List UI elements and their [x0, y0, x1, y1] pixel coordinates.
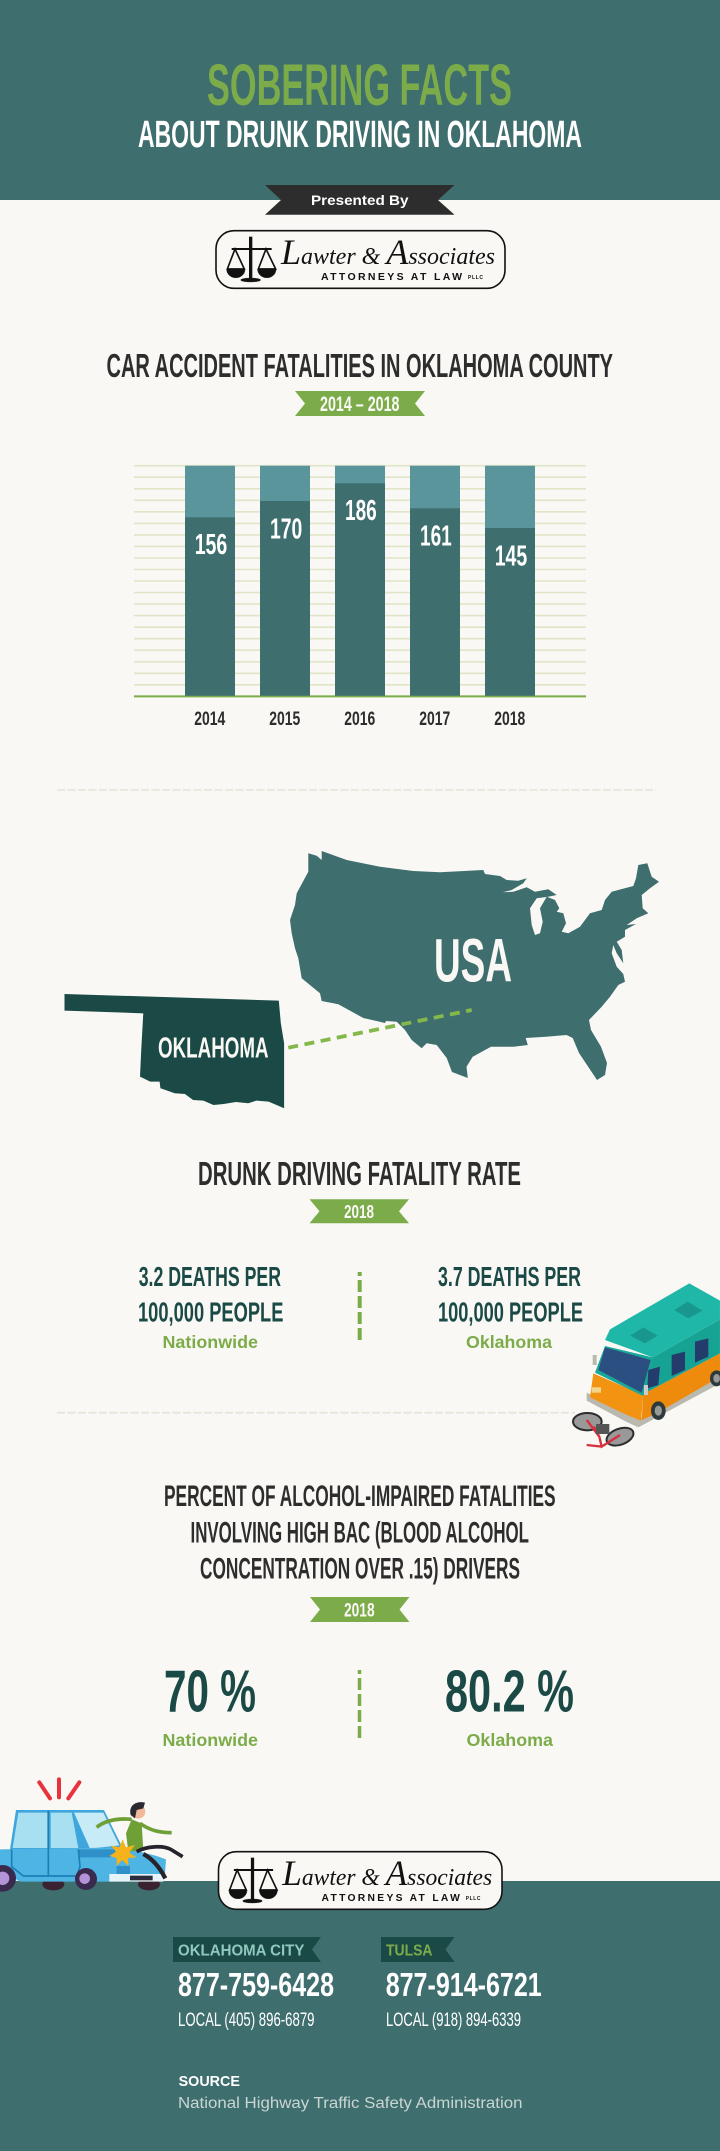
- header banner: [0, 0, 720, 200]
- stat: oklahoma percent: Oklahoma: [466, 1730, 553, 1750]
- bar 2014: 156: [195, 529, 227, 561]
- logo: Lawter & Associates: [216, 231, 505, 288]
- heading: fatality rate: DRUNK DRIVING FATALITY RATE: [198, 1156, 521, 1193]
- icon: bicycle: [573, 1413, 636, 1449]
- stat: oklahoma percent: 80.2 %: [445, 1659, 574, 1725]
- logo: Lawter & Associates: Lawter & Associates: [280, 232, 495, 272]
- stat: oklahoma rate: Oklahoma: [466, 1332, 552, 1352]
- contact: Tulsa: [381, 1937, 542, 2031]
- stat: nationwide rate: Nationwide: [162, 1332, 258, 1352]
- presented by ribbon: [265, 185, 454, 215]
- ribbon: 2014-2018: [295, 391, 425, 416]
- contact: Oklahoma City: OKLAHOMA CITY: [178, 1942, 305, 1959]
- pedestrian: [97, 1802, 183, 1878]
- contact: Tulsa: LOCAL (918) 894-6339: [386, 2009, 521, 2031]
- connector: dashed arrow line: [288, 1010, 472, 1048]
- bar 2017: [410, 466, 460, 730]
- bar chart: [134, 466, 586, 730]
- bar 2014: 2014: [194, 708, 225, 730]
- stat: nationwide rate: 3.2 DEATHS PER: [139, 1261, 281, 1292]
- map: Oklahoma: [64, 994, 284, 1108]
- logo: Lawter & Associates: PLLC: [468, 275, 483, 281]
- map: Oklahoma: OKLAHOMA: [158, 1032, 269, 1064]
- footer band: [0, 1881, 720, 2151]
- impact star: [109, 1839, 137, 1866]
- bar 2017: 2017: [419, 708, 450, 730]
- ribbon: 2018: [310, 1597, 410, 1622]
- bar 2015: 2015: [269, 708, 300, 730]
- logo: Lawter & Associates (footer): [218, 1852, 502, 1909]
- source: National Highway Traffic Safety Administration: [178, 2095, 522, 2112]
- contact: Oklahoma City: 877-759-6428: [178, 1967, 334, 2004]
- bar 2014: [185, 466, 235, 730]
- contact: Oklahoma City: LOCAL (405) 896-6879: [178, 2009, 314, 2031]
- ribbon: 2014-2018: 2014 – 2018: [320, 393, 400, 416]
- ribbon: 2018: 2018: [344, 1201, 374, 1222]
- logo: Lawter & Associates (footer): Lawter & Associates: [281, 1853, 492, 1893]
- logo: Lawter & Associates (footer): PLLC: [466, 1896, 481, 1902]
- icon: scales of justice: [227, 237, 276, 282]
- logo: Lawter & Associates (footer): ATTORNEYS AT LAW: [322, 1893, 460, 1904]
- bar 2016: 2016: [344, 708, 375, 730]
- heading: high BAC: [164, 1480, 556, 1585]
- icon: car hitting pedestrian: [0, 1779, 183, 1892]
- icon: bus hitting bicycle: [573, 1283, 720, 1449]
- ribbon: 2018: 2018: [344, 1600, 375, 1622]
- title: SOBERING FACTS: [207, 53, 512, 118]
- contact: Tulsa: TULSA: [386, 1942, 432, 1959]
- map: USA: USA: [434, 927, 512, 995]
- source: SOURCE: [179, 2073, 240, 2090]
- bar 2015: 170: [270, 513, 302, 545]
- stat: oklahoma rate: 3.7 DEATHS PER: [438, 1261, 581, 1292]
- contact: Oklahoma City: [173, 1937, 334, 2031]
- stat: nationwide percent: 70 %: [164, 1659, 256, 1725]
- stat: nationwide percent: [162, 1659, 258, 1750]
- bar 2017: 161: [420, 520, 452, 552]
- logo: Lawter & Associates: ATTORNEYS AT LAW: [321, 271, 462, 283]
- stat: nationwide rate: 100,000 PEOPLE: [138, 1297, 283, 1328]
- source: [178, 2073, 522, 2112]
- stat: oklahoma percent: [445, 1659, 574, 1750]
- ribbon: 2018: [310, 1199, 409, 1223]
- contact: Tulsa: 877-914-6721: [386, 1967, 542, 2004]
- bar 2018: [485, 466, 535, 730]
- presented by ribbon: Presented By: [311, 192, 409, 208]
- stat: nationwide rate: [138, 1261, 283, 1352]
- bar 2015: [260, 466, 310, 730]
- stat: oklahoma rate: [438, 1261, 583, 1352]
- stat: nationwide percent: Nationwide: [162, 1730, 258, 1750]
- bar 2018: 145: [495, 540, 527, 572]
- bar 2016: 186: [345, 495, 377, 527]
- map: USA: [290, 851, 659, 1080]
- bar 2018: 2018: [494, 708, 525, 730]
- icon: scales of justice: [229, 1858, 277, 1903]
- bar 2016: [335, 466, 385, 730]
- stat: oklahoma rate: 100,000 PEOPLE: [438, 1297, 583, 1328]
